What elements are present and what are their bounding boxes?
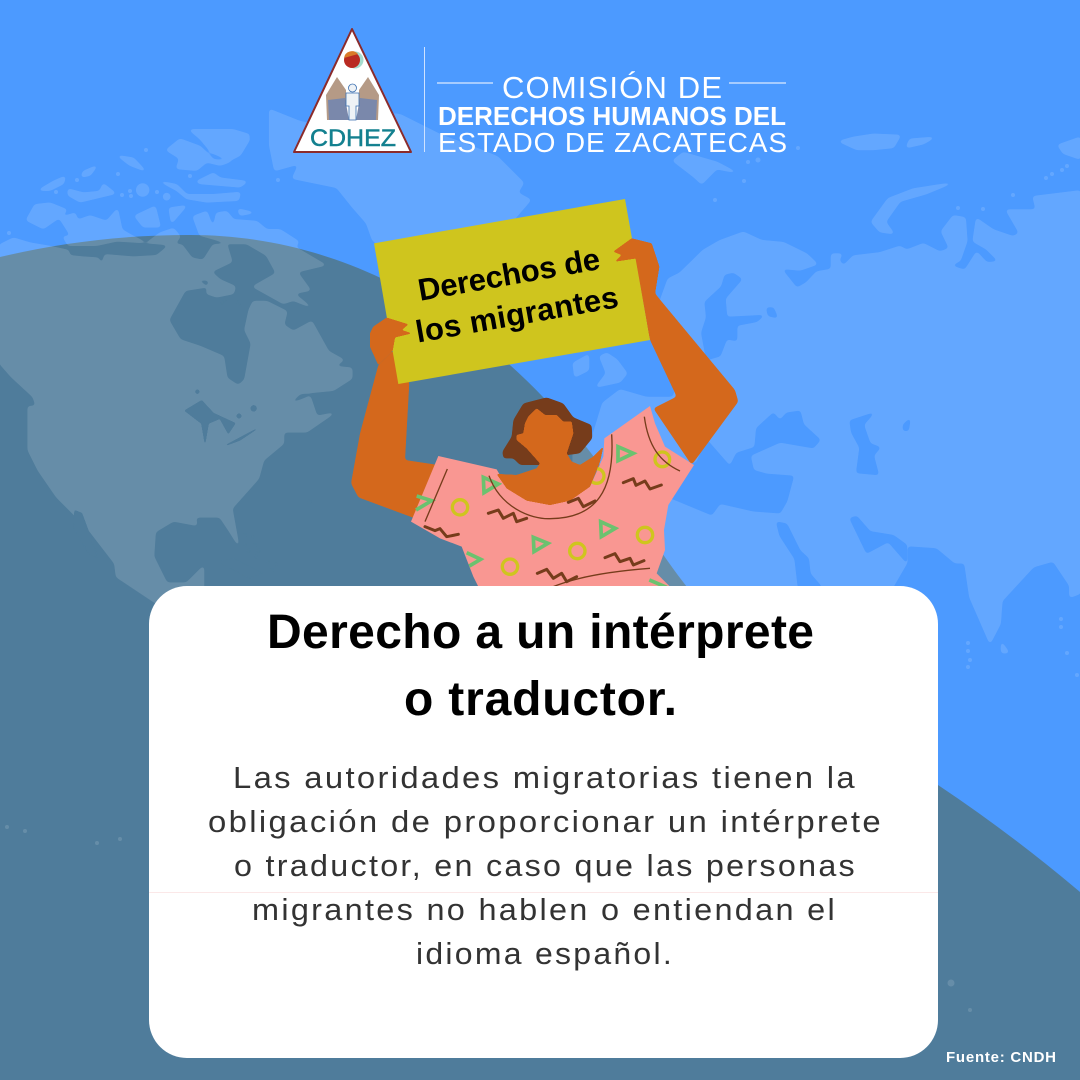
map dots	[5, 146, 1079, 1012]
shirt outline strokes	[425, 417, 680, 587]
seas and lakes over asia	[647, 274, 910, 587]
eurasia and africa	[573, 191, 1080, 643]
right hand fingers	[613, 238, 659, 340]
arctic islands	[27, 130, 325, 307]
card body text: Las autoridades migratorias tienen la	[233, 760, 857, 795]
card body text: idioma español.	[416, 936, 674, 971]
white text card	[149, 586, 938, 1058]
left hand fingers	[370, 318, 412, 365]
hair	[502, 397, 592, 465]
sign text	[413, 241, 621, 350]
right arm	[632, 238, 738, 465]
greenland	[270, 110, 530, 260]
logo person	[346, 84, 359, 120]
header institution name: DERECHOS HUMANOS DEL	[438, 101, 786, 131]
logo acronym: CDHEZ	[310, 125, 396, 152]
left arm	[351, 350, 438, 518]
sign text: los migrantes	[413, 279, 621, 350]
north america	[0, 238, 352, 603]
globe shape	[0, 235, 1080, 1080]
logo hands	[326, 77, 379, 120]
neck and chest	[497, 408, 603, 505]
sign	[374, 199, 650, 384]
header institution name: ESTADO DE ZACATECAS	[438, 127, 787, 158]
card body text	[208, 760, 883, 971]
header institution name	[437, 70, 787, 158]
source note: Fuente: CNDH	[946, 1049, 1056, 1066]
header divider	[424, 47, 425, 152]
card heading: Derecho a un intérprete	[267, 606, 814, 659]
card body text: migrantes no hablen o entiendan el	[252, 892, 837, 927]
card body text: o traductor, en caso que las personas	[234, 848, 857, 883]
illustration: woman holding sign	[351, 199, 738, 590]
sign text: Derechos de	[415, 241, 603, 308]
northern eurasian islands	[673, 135, 1080, 652]
card heading	[267, 606, 814, 726]
card heading: o traductor.	[404, 673, 677, 726]
lakes over north america	[73, 300, 311, 578]
logo sun	[344, 51, 364, 68]
header logo triangle	[294, 29, 411, 152]
british isles	[573, 353, 627, 387]
shirt	[411, 406, 694, 590]
header institution name: COMISIÓN DE	[502, 70, 722, 105]
shirt pattern	[416, 447, 670, 587]
card body text: obligación de proporcionar un intérprete	[208, 804, 883, 839]
